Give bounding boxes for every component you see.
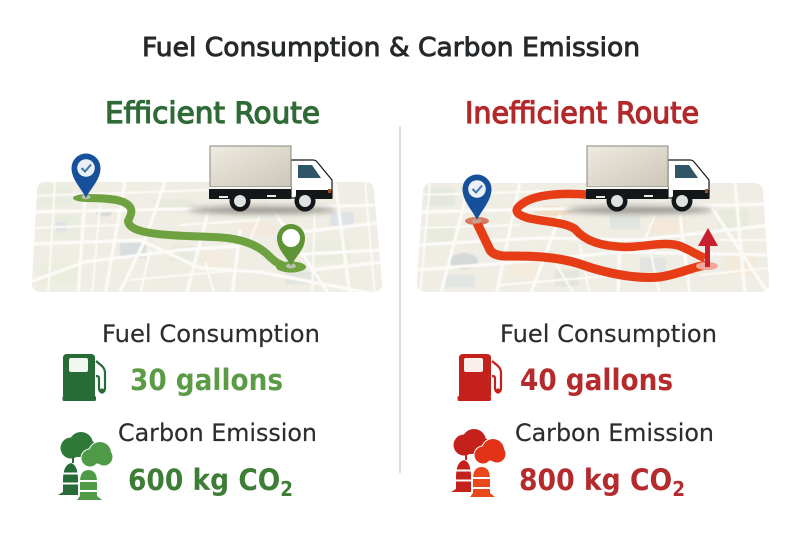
label: fuel consumption: Fuel Consumption	[500, 320, 717, 348]
value: 600 kg CO2: 600 kg CO	[128, 463, 295, 497]
panel: inefficient route	[415, 96, 772, 501]
map: inefficient route	[415, 181, 772, 296]
icon: truck	[565, 146, 713, 214]
icon: green fuel pump	[62, 354, 105, 401]
icon: red factory emission	[451, 429, 506, 497]
icon: truck	[188, 146, 336, 214]
label: carbon emission: Carbon Emission	[515, 419, 714, 447]
label: fuel consumption: Fuel Consumption	[102, 320, 320, 348]
value: 800 kg CO2: 2	[672, 477, 685, 501]
value: 600 kg CO2: 2	[280, 477, 293, 501]
value: 800 kg CO2: 800 kg CO	[519, 463, 686, 497]
icon: blue pin	[72, 154, 100, 198]
icon: blue pin	[462, 174, 492, 220]
icon: red fuel pump	[458, 354, 501, 401]
route: red path	[465, 194, 718, 277]
icon: green pin	[277, 224, 305, 266]
label: carbon emission: Carbon Emission	[118, 419, 317, 447]
route: green path	[73, 194, 306, 272]
title: Fuel Consumption & Carbon Emission	[142, 33, 640, 63]
value: 40 gallons: 40 gallons	[520, 363, 673, 397]
divider	[399, 126, 401, 473]
heading: inefficient route: Inefficient Route	[465, 96, 699, 130]
panel: efficient route	[30, 96, 385, 501]
map: efficient route	[30, 180, 385, 296]
value: 30 gallons: 30 gallons	[130, 363, 283, 397]
icon: green factory emission	[58, 432, 112, 500]
icon: red arrow	[698, 228, 718, 267]
heading: efficient route: Efficient Route	[105, 96, 320, 130]
